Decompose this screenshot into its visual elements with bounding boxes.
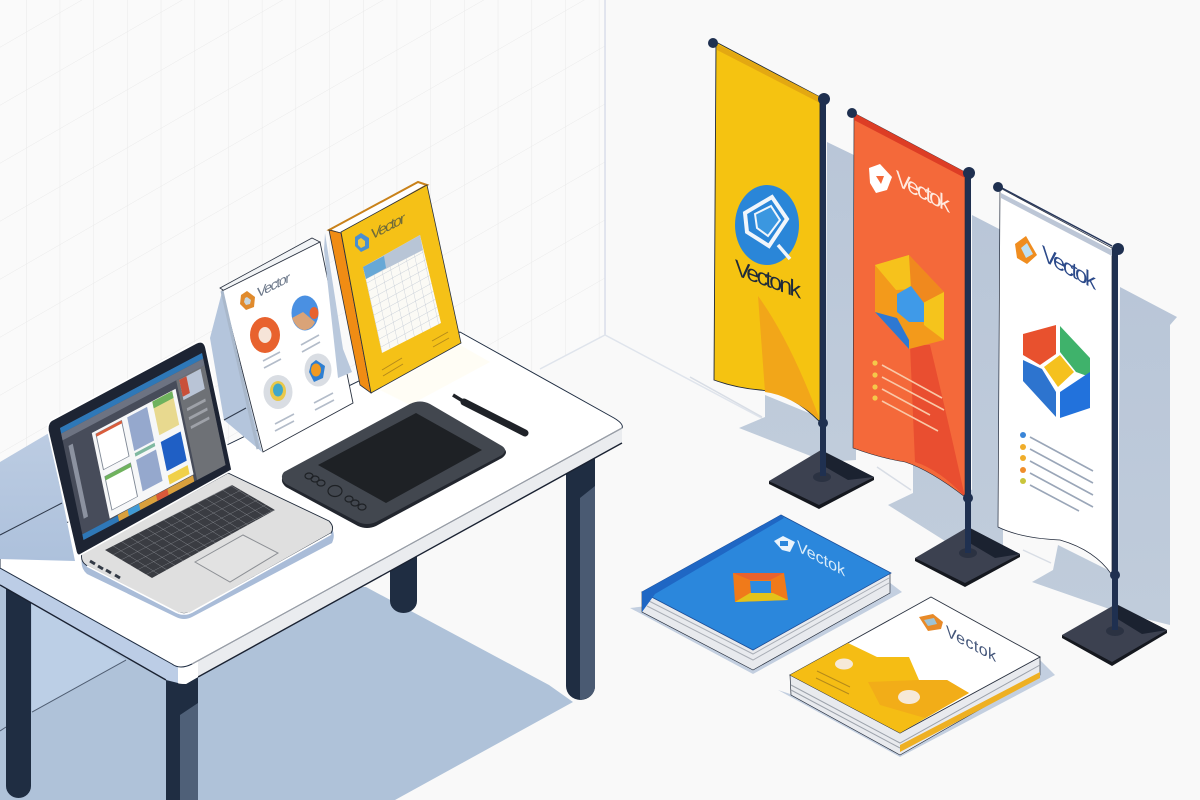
desk back leg [390, 555, 417, 613]
blue hardcover book [630, 515, 902, 674]
stack wordmark: Vectok [946, 622, 996, 666]
yellow stand base [769, 450, 874, 509]
white banner bullet list [1020, 432, 1093, 511]
lower left target chart [264, 375, 292, 409]
blue book logo [774, 536, 795, 552]
book calendar chart [363, 235, 441, 353]
trackpad [195, 535, 278, 582]
book spine [329, 230, 371, 393]
desk right rim [178, 427, 622, 684]
keyboard [105, 485, 275, 578]
yellow banner hem [717, 44, 820, 103]
orange banner accent shape [910, 345, 965, 497]
orange banner wordmark: Vectok [896, 165, 950, 218]
stack pages [790, 657, 1040, 755]
stack logo [919, 614, 943, 631]
laptop screen [60, 353, 226, 540]
yellow banner stand [708, 38, 874, 509]
drawing tablet [282, 402, 506, 528]
orange banner bullet list [872, 360, 944, 431]
book wordmark: Vector [371, 210, 406, 244]
laptop [48, 342, 334, 619]
yellow banner poles caps [708, 38, 830, 428]
orange donut chart [250, 317, 280, 353]
white stand base [1062, 604, 1167, 666]
white banner stand [993, 182, 1167, 666]
tablet screen [318, 413, 482, 503]
wall shadow of the desk [0, 433, 75, 561]
brochure spine and page [220, 238, 320, 292]
lower right cluster chart [304, 354, 332, 386]
orange stand base [915, 527, 1020, 587]
desk right front leg [566, 450, 595, 700]
book shadow [324, 233, 352, 378]
white banner wordmark: Vectok [1042, 241, 1096, 296]
blue pie chart [292, 296, 318, 330]
book cover [341, 185, 461, 393]
book caption lines [382, 332, 449, 376]
yellow report book [324, 182, 461, 393]
brochure wordmark: Vector [257, 270, 290, 302]
stack cover [790, 597, 1040, 733]
orange banner cloth [853, 113, 965, 497]
blue book wordmark: Vectok [797, 537, 845, 580]
desk front leg [166, 675, 198, 800]
white banner cloth [998, 188, 1112, 575]
stack circles [835, 658, 920, 704]
yellow banner wordmark: Vectonk [735, 256, 801, 305]
white banner caps [993, 182, 1124, 580]
brochure shadow side [210, 292, 262, 452]
stack shadow [778, 660, 1055, 757]
desk left rim [0, 568, 178, 683]
blue book cover [642, 515, 891, 650]
yellow banner pole [820, 99, 826, 476]
desk surface [0, 332, 622, 667]
brochure caption lines [263, 335, 334, 431]
stack caption lines [816, 671, 850, 694]
book pages [329, 182, 427, 234]
desk top [0, 332, 622, 684]
stylus pen [453, 395, 525, 433]
orange banner hem [854, 113, 965, 178]
blue book shadow [630, 575, 902, 674]
orange banner logo [869, 164, 892, 193]
yellow banner logo [735, 185, 799, 265]
yellow banner accent shape [758, 296, 820, 420]
brochure logo [240, 291, 255, 310]
orange banner caps [847, 108, 975, 503]
blue book spine [642, 515, 784, 612]
laptop base [82, 473, 334, 619]
stack yellow graphic [790, 643, 969, 733]
orange banner pole [965, 173, 971, 553]
tablet buttons [305, 473, 366, 510]
blue book pages [642, 573, 890, 670]
floor shadow beneath the desk [0, 572, 573, 800]
white banner logo [1015, 236, 1037, 264]
orange banner stand [847, 108, 1020, 587]
laptop lid [48, 342, 232, 555]
white banner hem [1000, 187, 1112, 246]
blue book diamond icon [733, 573, 788, 602]
white banner pole [1112, 249, 1118, 630]
yellow banner cloth [714, 42, 820, 422]
banner wall and floor shadows [739, 142, 1177, 625]
white banner cube graphic [1023, 325, 1090, 418]
tent brochure [210, 238, 353, 452]
book logo [355, 233, 369, 252]
desk left leg [6, 585, 31, 798]
white and yellow brochure stack [778, 597, 1055, 757]
orange banner hexagon graphic [875, 255, 944, 349]
stack orange layer [900, 672, 1040, 752]
